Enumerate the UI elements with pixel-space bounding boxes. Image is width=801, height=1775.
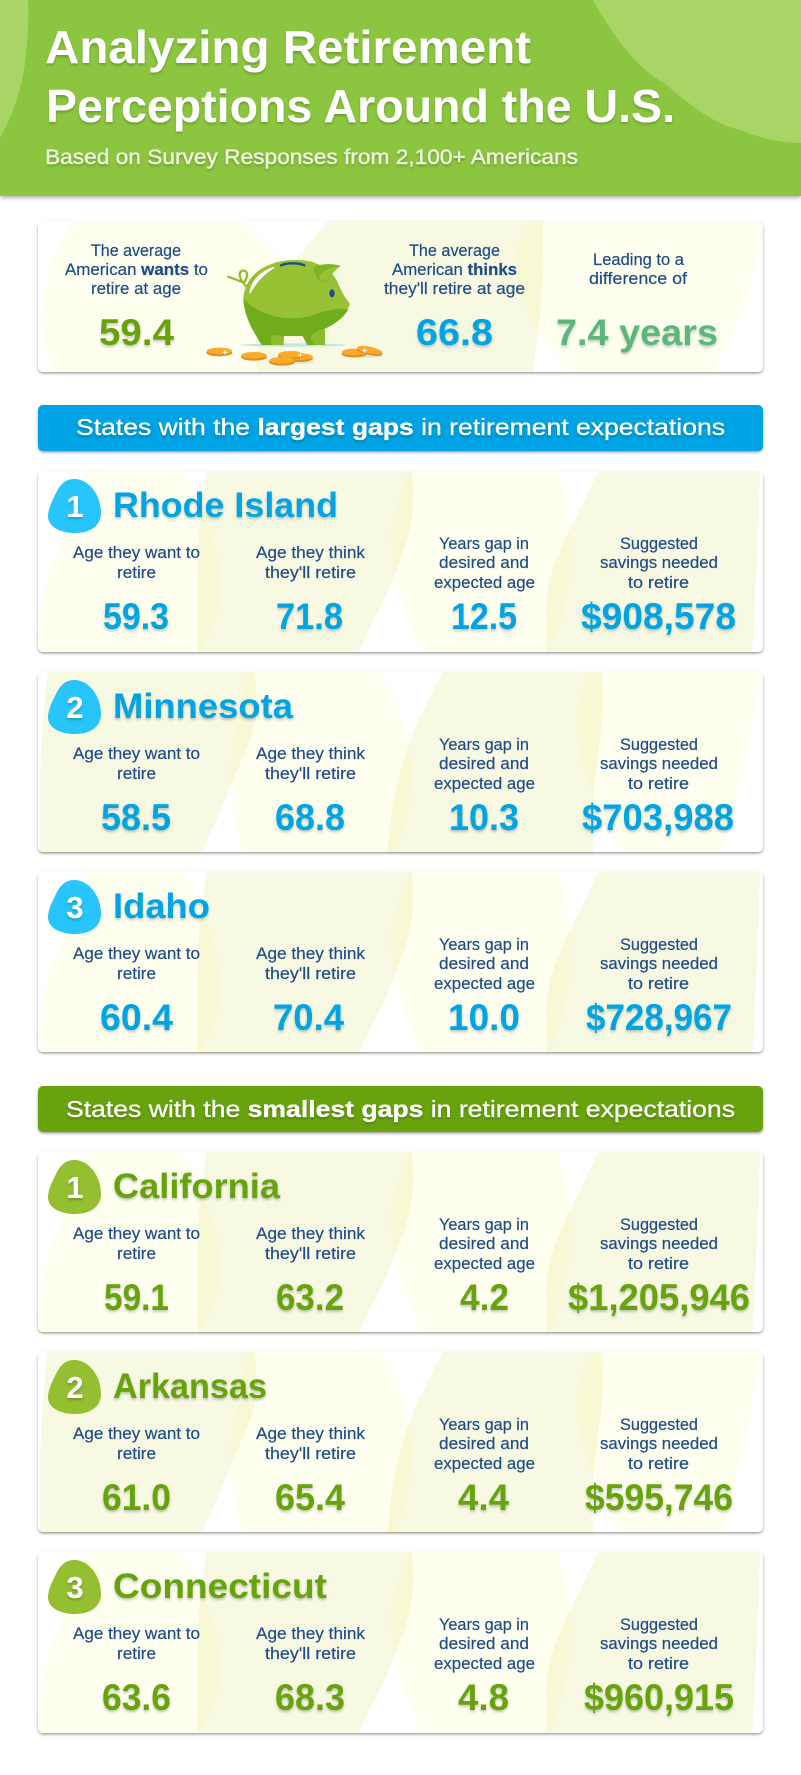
text: difference: [556, 251, 718, 353]
text: difference: Leading to a: [593, 251, 685, 269]
state name: California: [113, 1167, 281, 1206]
rank badge 1: 1: [66, 489, 84, 524]
stat values: [102, 1677, 734, 1718]
stat values: $960,915: [584, 1677, 734, 1718]
text: thinks they will retire: they'll retire at age: [384, 280, 525, 298]
heading: smallest gaps: States with the smallest gaps in retirement expectations: [66, 1096, 735, 1122]
rank badge 1: [48, 479, 101, 533]
state name: Connecticut: [113, 1567, 327, 1606]
text: wants to retire: American wants to: [65, 261, 208, 279]
rank badge 3: 3: [66, 1570, 84, 1605]
title: [45, 21, 675, 132]
heading: largest gaps: [38, 405, 763, 451]
stat labels: [73, 535, 718, 592]
panel: California: [38, 1152, 763, 1333]
state name: Rhode Island: [113, 486, 338, 525]
text: difference: 7.4 years: [556, 312, 718, 353]
text: wants to retire: 59.4: [99, 312, 174, 353]
rank badge 3: 3: [66, 890, 84, 925]
rank badge 2: [48, 680, 101, 734]
stat values: 70.4: [273, 997, 344, 1038]
stat values: 60.4: [100, 997, 173, 1038]
stat values: 63.2: [276, 1277, 344, 1318]
rank badge 2: 2: [66, 690, 84, 725]
stat labels: [73, 936, 718, 993]
rank badge 2: 2: [66, 1370, 84, 1405]
panel: Rhode Island: [38, 471, 763, 652]
stat values: 63.6: [102, 1677, 171, 1718]
stat values: 71.8: [276, 596, 343, 637]
text: thinks they will retire: The average: [409, 242, 500, 260]
stat values: [104, 1277, 750, 1318]
heading: smallest gaps: [38, 1086, 763, 1132]
text: thinks they will retire: [384, 242, 525, 353]
stat values: [103, 596, 736, 637]
text: thinks they will retire: 66.8: [416, 312, 493, 353]
stat labels: [73, 1616, 718, 1673]
coins: [206, 344, 383, 366]
panel: national averages: [38, 221, 763, 372]
heading: largest gaps: States with the largest gaps in retirement expectations: [76, 414, 725, 440]
text: wants to retire: retire at age: [91, 280, 181, 298]
stat values: $595,746: [585, 1477, 733, 1518]
stat labels: [73, 736, 718, 793]
decorative corner blob: top right: [593, 0, 801, 143]
rank badge 1: [48, 1160, 101, 1214]
state name: Idaho: [113, 887, 210, 926]
text: difference: difference of: [589, 270, 687, 288]
decorative corner blob: top left: [0, 0, 28, 138]
rank badge 1: 1: [66, 1170, 84, 1205]
panel: Idaho: [38, 872, 763, 1053]
panel: Arkansas: [38, 1352, 763, 1533]
stat values: 12.5: [451, 596, 517, 637]
stat values: $1,205,946: [568, 1277, 750, 1318]
stat values: 4.4: [458, 1477, 509, 1518]
stat values: 59.1: [104, 1277, 169, 1318]
state name: Minnesota: [113, 687, 294, 726]
stat values: 4.8: [458, 1677, 509, 1718]
stat values: 68.8: [275, 797, 345, 838]
stat labels: [73, 1416, 718, 1473]
panel: Minnesota: [38, 672, 763, 853]
rank badge 3: [48, 1560, 101, 1614]
text: wants to retire: [65, 242, 208, 353]
state name: Arkansas: [113, 1367, 267, 1406]
stat labels: [73, 1216, 718, 1273]
stat values: 68.3: [275, 1677, 345, 1718]
stat values: 65.4: [275, 1477, 345, 1518]
header banner: [0, 0, 801, 196]
stat values: 58.5: [101, 797, 171, 838]
rank badge 2: [48, 1360, 101, 1414]
stat values: $703,988: [582, 797, 734, 838]
stat values: $728,967: [586, 997, 732, 1038]
stat values: $908,578: [581, 596, 736, 637]
stat values: [102, 1477, 733, 1518]
title: Analyzing Retirement: [45, 21, 531, 73]
subtitle: Based on Survey Responses from 2,100+ Americans: [45, 146, 578, 169]
text: thinks they will retire: American thinks: [392, 261, 517, 279]
icon: piggy bank with coins: [206, 260, 383, 366]
stat values: 61.0: [102, 1477, 171, 1518]
stat values: 10.0: [448, 997, 520, 1038]
stat values: 59.3: [103, 596, 169, 637]
panel: Connecticut: [38, 1552, 763, 1733]
text: wants to retire: The average: [91, 242, 181, 260]
stat values: 4.2: [460, 1277, 509, 1318]
stat values: [101, 797, 734, 838]
stat values: 10.3: [449, 797, 519, 838]
rank badge 3: [48, 880, 101, 934]
stat values: [100, 997, 732, 1038]
title: Perceptions Around the U.S.: [46, 80, 675, 132]
